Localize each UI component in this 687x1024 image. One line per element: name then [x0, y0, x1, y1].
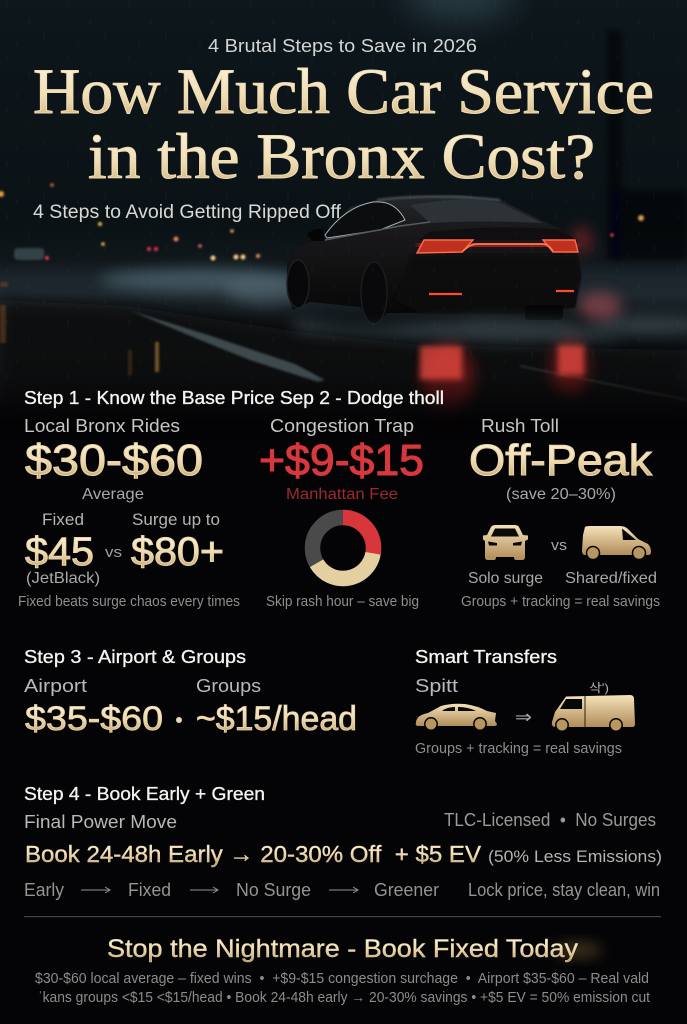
flow: early to greener: No Surge	[236, 880, 311, 900]
icon: sedan	[416, 704, 497, 730]
icon: car front	[483, 525, 528, 560]
red reflections under car	[420, 336, 590, 414]
panel: rush toll: Groups + tracking = real savings	[461, 594, 660, 610]
panel: rush toll: Rush Toll	[481, 416, 559, 436]
side windows	[325, 202, 405, 238]
main title: in the Bronx Cost?	[88, 121, 595, 193]
dark wet road	[0, 300, 687, 420]
mirror	[307, 229, 324, 241]
panel: local Bronx rides: $30-$60	[25, 436, 203, 485]
panel: smart transfers: Spitt	[415, 676, 458, 696]
panel: congestion trap: +$9-$15	[259, 436, 424, 485]
main title	[33, 56, 654, 193]
top light glow	[405, 0, 515, 20]
panel: step 4 book early and green	[24, 784, 662, 900]
panel: step 3 airport and groups: Groups	[196, 676, 261, 696]
panel: smart transfers: ⇒	[515, 707, 532, 727]
footer summary: $30-$60 local average – fixed wins • +$9-$15 congestion surchage • Airport $35-$60 – Real vald	[35, 971, 649, 987]
flow: early to greener: Lock price, stay clean, win	[468, 880, 660, 900]
panel: step 3 airport and groups: Step 3 - Airport & Groups	[24, 647, 246, 667]
flow: early to greener: Fixed	[128, 880, 171, 900]
city skyline silhouette	[607, 30, 687, 260]
hero photo: rainy street with car	[0, 0, 687, 420]
distant city lights	[0, 183, 644, 260]
panel: local Bronx rides: Local Bronx Rides	[24, 416, 180, 436]
main title: How Much Car Service	[33, 56, 654, 128]
flow: early to greener: Early	[24, 880, 64, 900]
car body	[287, 195, 581, 325]
panel: local Bronx rides: vs	[105, 544, 122, 561]
panel: local Bronx rides: Surge up to	[132, 510, 220, 529]
panel: local Bronx rides: $80+	[131, 530, 224, 574]
panel: smart transfers: Groups + tracking = real savings	[415, 740, 622, 757]
panel: congestion trap: Manhattan Fee	[286, 486, 398, 503]
footer summary	[35, 971, 650, 1006]
rear reflectors	[429, 291, 574, 294]
panel: step 4 book early and green: Final Power Move	[24, 812, 177, 832]
panel: local Bronx rides: $45	[25, 530, 94, 574]
panel: local Bronx rides	[18, 416, 240, 610]
rear body shadow	[395, 255, 581, 314]
panel: step 4 book early and green: Step 4 - Book Early + Green	[24, 784, 265, 804]
tail spray	[578, 292, 622, 320]
donut chart	[312, 518, 374, 578]
panel: smart transfers: Smart Transfers	[415, 647, 557, 667]
panel: step 3 airport and groups: Airport	[24, 676, 87, 696]
panel: local Bronx rides: Fixed beats surge chaos every times	[18, 594, 240, 610]
panel: step 3 airport and groups: ~$15/head	[196, 700, 357, 738]
panel: rush toll	[461, 416, 660, 610]
panel: rush toll: Solo surge	[468, 570, 543, 587]
wheel spray	[290, 318, 625, 342]
panel: local Bronx rides: (JetBlack)	[26, 570, 100, 587]
panel: rush toll: (save 20–30%)	[506, 486, 616, 503]
panel: local Bronx rides: Average	[82, 486, 144, 503]
roof highlight	[377, 196, 500, 200]
road marking	[131, 311, 325, 382]
panel: congestion trap	[259, 416, 424, 610]
tagline: 4 Steps to Avoid Getting Ripped Off	[33, 202, 342, 223]
tail light glow	[418, 244, 577, 246]
panel: rush toll: Shared/fixed	[565, 570, 657, 587]
panel: step 4 book early and green: Book 24-48h Early → 20-30% Off + $5 EV	[25, 841, 482, 867]
fade into black	[0, 375, 687, 420]
icon: large van	[552, 695, 635, 731]
panel: step 3 airport and groups	[24, 647, 357, 738]
panel: step 4 book early and green: (50% Less Emissions)	[488, 847, 662, 866]
road mist	[100, 269, 687, 335]
rain	[0, 0, 687, 400]
footer summary: ˈkans groups <$15 <$15/head • Book 24-48h early → 20-30% savings • +$5 EV = 50% emission cut	[38, 990, 650, 1006]
icon label above van: 삭')	[589, 681, 609, 695]
reflections on left	[0, 282, 159, 375]
panel: step 3 airport and groups: $35-$60	[25, 700, 163, 738]
panel: local Bronx rides: Fixed	[42, 510, 84, 529]
door reflection	[325, 222, 430, 240]
panel: step 4 book early and green: TLC-Licensed • No Surges	[444, 810, 656, 830]
footer call to action: Stop the Nightmare - Book Fixed Today	[107, 935, 579, 963]
trunk lid	[418, 227, 574, 240]
rear window	[410, 199, 543, 223]
flow: early to greener	[24, 880, 660, 900]
flow: early to greener: Greener	[374, 880, 439, 900]
tail light	[417, 240, 578, 253]
panel: rush toll: vs	[551, 537, 567, 554]
wheels	[287, 260, 309, 308]
icon: van	[582, 526, 651, 560]
step 1 and 2 heading: Step 1 - Know the Base Price Sep 2 - Dodge tholl	[24, 387, 444, 408]
panel: congestion trap: Skip rash hour – save big	[266, 594, 419, 610]
header subtitle: 4 Brutal Steps to Save in 2026	[208, 36, 477, 56]
panel: congestion trap: Congestion Trap	[270, 416, 414, 436]
panel: smart transfers	[415, 647, 635, 757]
panel: rush toll: Off-Peak	[469, 436, 653, 485]
